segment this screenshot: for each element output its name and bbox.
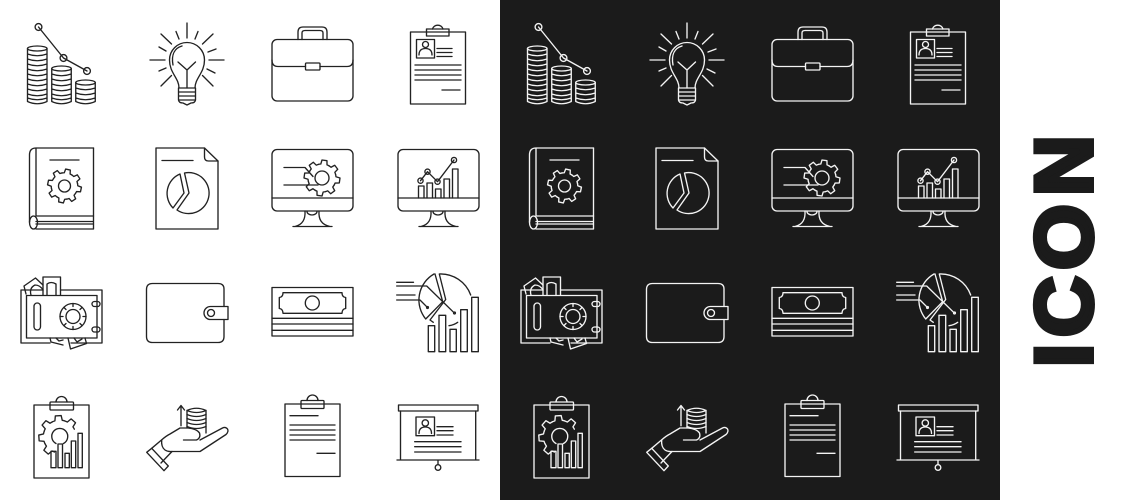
icon: hand holding coins, white (647, 406, 728, 471)
icon: book with gear, white (530, 148, 594, 229)
icon: clipboard with gear and bars (34, 396, 89, 478)
icon: monitor with growth chart (398, 150, 479, 226)
icon: resume on clipboard (410, 25, 466, 104)
icon: clipboard document, white (785, 395, 840, 476)
icon: wallet, white (646, 284, 728, 342)
title: ICON vertical: ICON (1018, 135, 1109, 367)
icon: document with pie chart, white (656, 148, 718, 229)
icon: stack of cash (272, 288, 353, 336)
icon: coin stacks with falling trend (28, 24, 95, 104)
icon: book with gear (30, 148, 94, 229)
icon: monitor with gear (272, 150, 353, 226)
icon: coin stacks with falling trend, white (528, 24, 595, 104)
icon: clipboard with gear and bars, white (534, 396, 589, 478)
icon: light bulb (150, 23, 224, 105)
icon: presentation board with profile, white (897, 405, 979, 470)
panel: right title strip (1000, 0, 1126, 500)
panel: dark outline icons (521, 23, 979, 478)
icon: clipboard document (285, 395, 340, 476)
icon: stack of cash, white (772, 288, 853, 336)
icon: resume on clipboard, white (910, 25, 966, 104)
icon: hand holding coins (147, 406, 228, 471)
icon: briefcase (272, 27, 353, 101)
icon: monitor with gear, white (772, 150, 853, 226)
icon: pie and bar chart (397, 274, 478, 352)
panel: light background (0, 0, 500, 500)
icon: light bulb, white (650, 23, 724, 105)
icon: pie and bar chart, white (897, 274, 978, 352)
icon: briefcase, white (772, 27, 853, 101)
icon: safe with money, white (521, 277, 602, 349)
icon: wallet (146, 284, 228, 342)
icon: monitor with growth chart, white (898, 150, 979, 226)
icon: safe with money (21, 277, 102, 349)
panel: dark background (500, 0, 1000, 500)
icon: document with pie chart (156, 148, 218, 229)
panel: light outline icons (21, 23, 479, 478)
icon: presentation board with profile (397, 405, 479, 470)
